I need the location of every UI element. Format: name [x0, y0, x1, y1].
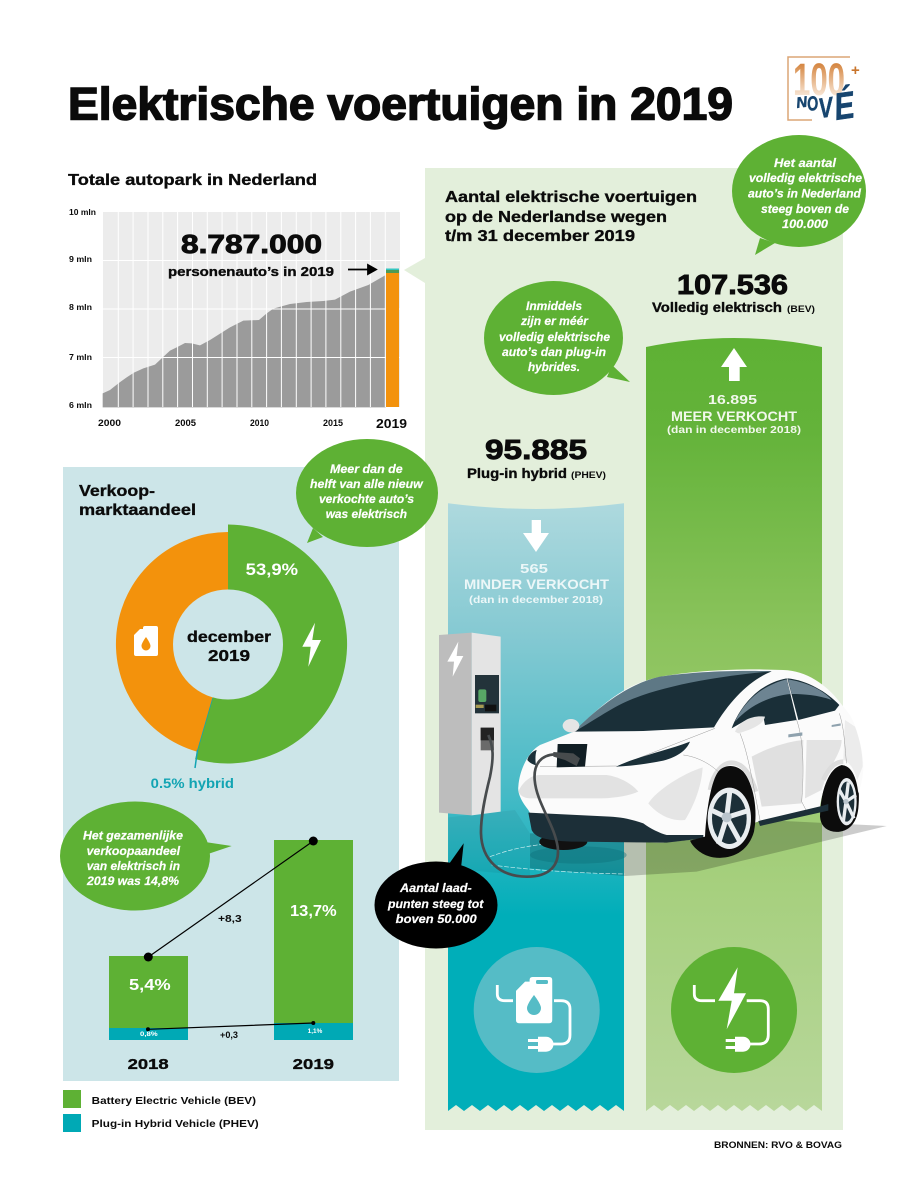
axis labels y: 6 mln — [69, 400, 92, 410]
label: center: december — [187, 629, 271, 646]
car body — [518, 669, 863, 843]
logo: 100+ Nové: O — [806, 93, 820, 116]
bar 2019: 1,1% — [308, 1029, 323, 1035]
year labels: 2018 — [128, 1056, 169, 1073]
axis labels y: 9 mln — [69, 254, 92, 264]
PHEV sales text: (dan in december 2018) — [469, 595, 603, 606]
heading: verkoop-marktaandeel — [79, 483, 196, 519]
callout: 100.000: auto’s in Nederland — [748, 186, 862, 200]
body shading — [518, 713, 863, 820]
BEV sales text: MEER VERKOCHT — [671, 408, 797, 424]
PHEV sales text — [464, 561, 609, 606]
icon: BEV circle — [671, 947, 797, 1073]
side windows — [732, 678, 839, 728]
callout: gezamenlijk aandeel: 2019 was 14,8% — [86, 874, 179, 888]
logo: 100+ Nové: N — [795, 93, 809, 112]
icon: jerry can — [134, 626, 158, 656]
axis labels x: 2019 — [376, 416, 407, 431]
trend lines — [144, 836, 318, 1031]
axis labels y — [69, 207, 96, 410]
callout: meer dan de helft: helft van alle nieuw — [310, 477, 423, 491]
donut chart — [116, 524, 347, 791]
arrow: up — [721, 348, 747, 381]
logo: 100+ Nové: É — [831, 82, 858, 129]
bar chart — [109, 836, 353, 1073]
axis labels x — [98, 416, 407, 431]
stat: BEV total: 107.536 — [677, 269, 788, 300]
sill — [758, 804, 828, 826]
illustration: electric car — [518, 669, 863, 858]
delta labels: +0,3 — [220, 1030, 238, 1040]
callout: gezamenlijk aandeel — [60, 802, 232, 910]
windshield — [574, 671, 772, 732]
logo: 100+ Nové: V — [817, 91, 836, 124]
year labels — [128, 1056, 334, 1073]
axis labels y: 10 mln — [69, 207, 96, 217]
title: Elektrische voertuigen in 2019 — [68, 78, 733, 130]
axis labels x: 2005 — [175, 418, 196, 428]
axis labels y: 8 mln — [69, 302, 92, 312]
front left light — [527, 750, 537, 765]
headlight — [616, 742, 690, 767]
charge port — [557, 744, 587, 767]
delta labels — [218, 914, 242, 1040]
stat: PHEV total — [467, 434, 606, 481]
mirrors — [563, 716, 765, 733]
front wheel — [690, 766, 756, 858]
icon: bolt — [302, 623, 321, 667]
arrow — [348, 265, 376, 274]
callout: 100.000: 100.000 — [782, 217, 828, 231]
callout: laadpunten: punten steeg tot — [387, 897, 484, 911]
icon: PHEV circle — [474, 947, 600, 1073]
stat: PHEV total: Plug-in hybrid — [467, 466, 567, 481]
callout: meer dan plug-in — [484, 281, 630, 395]
callout: gezamenlijk aandeel: verkoopaandeel — [87, 844, 181, 858]
heading: aantal voertuigen — [445, 189, 697, 245]
callout: meer dan plug-in: Inmiddels — [526, 299, 582, 313]
legend — [63, 1090, 259, 1132]
callout: meer dan plug-in: volledig elektrische — [499, 330, 610, 344]
legend: Plug-in Hybrid Vehicle (PHEV) — [92, 1118, 259, 1130]
heading: totale autopark: Totale autopark in Nederland — [68, 172, 317, 189]
label: center — [187, 629, 271, 665]
bar 2018 — [109, 956, 188, 1040]
illustration: charging station — [439, 633, 501, 815]
area chart: autopark — [69, 207, 407, 431]
stacked 2019 bar — [386, 268, 399, 407]
bar 2018: 5,4% — [129, 977, 171, 994]
stat: BEV total: Volledig elektrisch — [652, 300, 782, 315]
callout: 100.000: volledig elektrische — [749, 171, 862, 185]
callout: laadpunten: boven 50.000 — [396, 912, 477, 926]
callout: meer dan plug-in: auto’s dan plug-in — [502, 345, 606, 359]
sub label: personenauto’s in 2019 — [168, 264, 334, 279]
callout: meer dan de helft: Meer dan de — [330, 462, 403, 476]
source: BRONNEN: RVO & BOVAG — [714, 1140, 842, 1151]
column: PHEV — [448, 503, 624, 1111]
heading: aantal voertuigen: op de Nederlandse wegen — [445, 209, 667, 226]
legend: Battery Electric Vehicle (BEV) — [92, 1095, 256, 1107]
stat: BEV total — [652, 269, 815, 315]
panel: aantal voertuigen — [404, 168, 843, 1130]
PHEV sales text: MINDER VERKOCHT — [464, 576, 609, 592]
big number: 8.787.000 — [181, 229, 322, 259]
bar 2019 — [274, 840, 353, 1040]
callout: meer dan plug-in: hybrides. — [528, 360, 580, 374]
stat: BEV total: (BEV) — [787, 304, 815, 315]
year labels: 2019 — [293, 1056, 334, 1073]
callout: meer dan plug-in: zijn er méér — [520, 314, 589, 328]
illustration: ground shadow — [448, 810, 887, 876]
bar 2019: 13,7% — [290, 903, 337, 920]
stat: PHEV total: 95.885 — [485, 434, 587, 465]
axis labels y: 7 mln — [69, 352, 92, 362]
lower grille — [528, 813, 703, 843]
illustration: charging cable — [481, 735, 580, 877]
callout: gezamenlijk aandeel: van elektrisch in — [87, 859, 180, 873]
heading: aantal voertuigen: t/m 31 december 2019 — [445, 228, 635, 245]
PHEV sales text: 565 — [520, 561, 548, 576]
callout: laadpunten: Aantal laad- — [399, 881, 472, 895]
callout: meer dan de helft: was elektrisch — [326, 507, 407, 521]
BEV sales text: (dan in december 2018) — [667, 425, 801, 436]
label: center: 2019 — [208, 648, 250, 665]
panel: verkoop-marktaandeel — [63, 467, 399, 1081]
heading: verkoop-marktaandeel: Verkoop- — [79, 483, 155, 500]
logo: 100+ Nové: 100 — [793, 54, 845, 105]
delta labels: +8,3 — [218, 914, 242, 925]
heading: verkoop-marktaandeel: marktaandeel — [79, 502, 196, 519]
callout: gezamenlijk aandeel: Het gezamenlijke — [83, 828, 183, 842]
BEV sales text: 16.895 — [708, 392, 757, 407]
arrow: down — [523, 520, 549, 552]
callout: laadpunten — [374, 843, 498, 948]
axis labels x: 2000 — [98, 418, 121, 428]
stat: PHEV total: (PHEV) — [571, 470, 606, 481]
axis labels x: 2015 — [323, 418, 343, 428]
callout: meer dan de helft: verkochte auto’s — [319, 492, 414, 506]
bar 2018: 0,8% — [140, 1032, 159, 1038]
heading: aantal voertuigen: Aantal elektrische voertuigen — [445, 189, 697, 206]
BEV sales text — [667, 392, 801, 436]
callout: 100.000: Het aantal — [774, 156, 837, 170]
axis labels x: 2010 — [250, 418, 269, 428]
callout: 100.000: steeg boven de — [761, 202, 849, 216]
callout: meer dan de helft — [296, 439, 438, 547]
column: BEV — [646, 338, 822, 1111]
rear wheel — [820, 765, 859, 832]
front tyre under grille — [539, 833, 587, 850]
label: hybrid: 0.5% hybrid — [151, 775, 234, 791]
logo: 100+ Nové — [788, 54, 860, 129]
callout: 100.000 — [732, 135, 866, 255]
logo: 100+ Nové: + — [851, 62, 860, 79]
label: share: 53,9% — [246, 560, 298, 579]
